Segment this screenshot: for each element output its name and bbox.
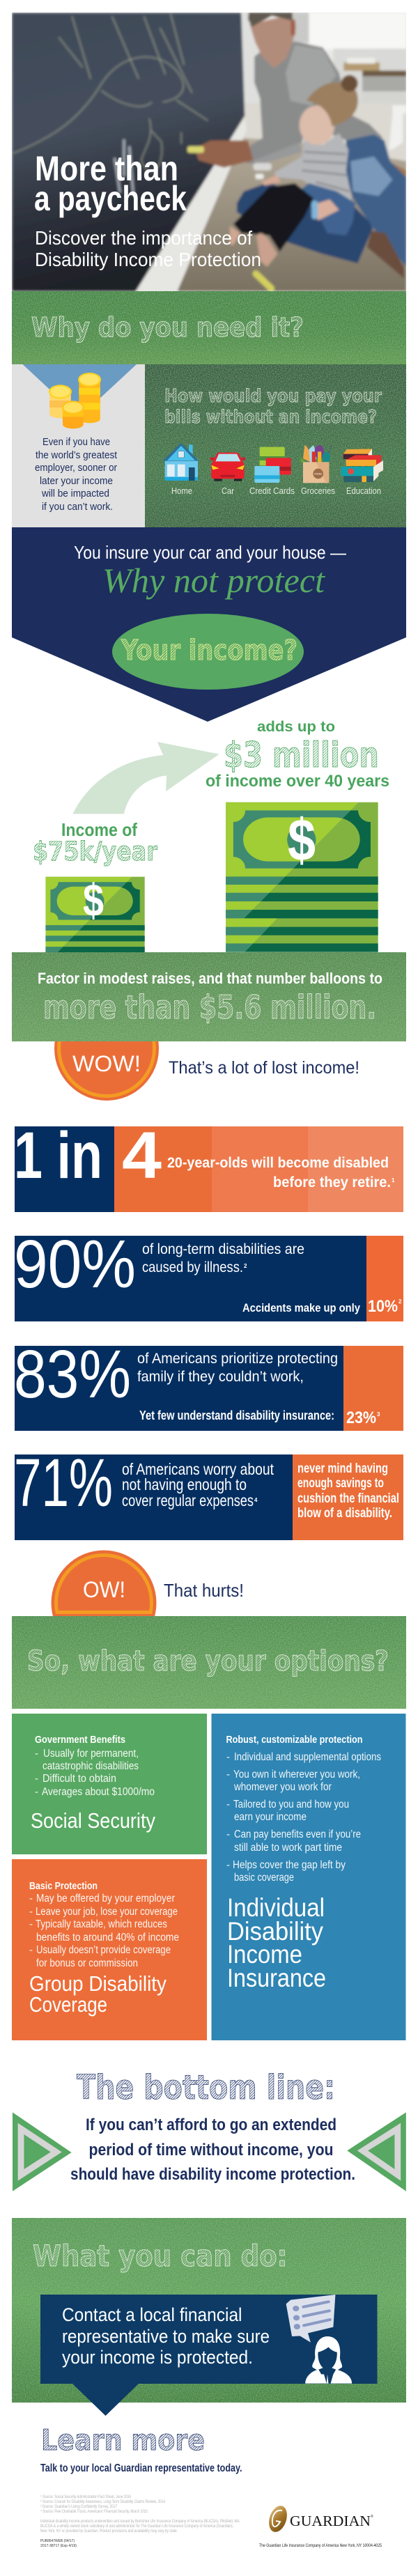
stat: 83 percent: 23% <box>346 1409 376 1427</box>
text: adds up to $3 million: $3 million <box>224 735 379 775</box>
text: income of $75k per year: Income of <box>61 819 137 840</box>
hero subtitle <box>35 227 261 270</box>
icon: groceries <box>301 445 332 483</box>
panel: individual disability income insurance: Individual <box>227 1893 325 1922</box>
footnotes <box>40 2495 240 2548</box>
callout: contact representative: representative to make sure <box>62 2326 270 2347</box>
panel: individual disability income insurance <box>212 1714 405 2040</box>
stat: 1 in 4: 1 <box>392 1177 395 1184</box>
text: even if you have: Even if you have <box>42 436 110 448</box>
heading: learn more: Learn more <box>41 2423 205 2457</box>
panel: individual disability income insurance: Individual and supplemental options <box>234 1751 381 1763</box>
icon labels: Car <box>222 486 234 496</box>
text: talk to your local representative: Talk to your local Guardian representative today. <box>40 2462 242 2474</box>
text: adds up to $3 million <box>206 719 389 791</box>
footnotes: BLICOA is a wholly owned stock subsidiary of and administrator for The Guardian Life Insurance Company of America (Guardian), <box>40 2524 233 2529</box>
panel: social security: - <box>35 1773 38 1785</box>
stat: 71 percent: cover regular expenses <box>122 1491 254 1510</box>
panel: group disability coverage: - <box>29 1906 33 1918</box>
stat: 90 percent: of long-term disabilities are <box>142 1241 304 1257</box>
stat: 71 percent: 4 <box>254 1497 258 1503</box>
icon labels <box>171 486 381 496</box>
text: bottom line statement: should have disability income protection. <box>70 2165 355 2184</box>
stat: 71 percent: 71% <box>14 1445 113 1521</box>
text: adds up to $3 million: of income over 40 years <box>206 772 389 791</box>
badge: wow: WOW! <box>72 1051 141 1076</box>
panel: group disability coverage: Basic Protection <box>29 1880 98 1892</box>
stat: 90 percent <box>14 1226 403 1321</box>
stat: 1 in 4: 20-year-olds will become disabled <box>167 1155 389 1171</box>
panel: individual disability income insurance: whomever you work for <box>233 1781 332 1793</box>
panel: individual disability income insurance: - <box>226 1829 230 1840</box>
stat: 71 percent: never mind having <box>297 1461 388 1476</box>
panel: individual disability income insurance: - <box>226 1799 230 1810</box>
icon labels: Groceries <box>301 486 335 496</box>
icon: groceries: FOOD <box>314 472 322 475</box>
panel: individual disability income insurance: Tailored to you and how you <box>233 1799 349 1810</box>
stat: 83 percent: 83% <box>14 1336 131 1412</box>
hero title: a paycheck <box>34 179 187 218</box>
icon: small stack of money: $ <box>83 874 104 926</box>
icon labels: Credit Cards <box>249 486 295 496</box>
icon: right triangle <box>347 2112 406 2191</box>
badge: ow <box>52 1551 156 1616</box>
panel: social security: Social Security <box>31 1808 155 1833</box>
icon: representative <box>305 2336 352 2384</box>
icon: big stack of money: $ <box>288 807 316 874</box>
badge: your income <box>112 614 304 690</box>
callout: contact representative: your income is protected. <box>62 2347 253 2368</box>
footnotes: ⁴ Source: Pew Charitable Trusts, Americans’ Financial Security, March 2015. <box>40 2509 148 2514</box>
panel: individual disability income insurance: You own it wherever you work, <box>233 1769 360 1780</box>
stat: 1 in 4: 4 <box>122 1119 162 1193</box>
heading: how would you pay <box>164 386 382 428</box>
panel: group disability coverage <box>12 1859 207 2040</box>
heading: how would you pay: bills without an income? <box>164 407 377 428</box>
hero subtitle: Disability Income Protection <box>35 249 261 270</box>
panel: group disability coverage: for bonus or commission <box>36 1957 138 1969</box>
icon: speech bubble <box>286 2295 335 2343</box>
stat: 90 percent: 10% <box>368 1297 398 1316</box>
text: why not protect: Why not protect <box>102 561 325 600</box>
panel: individual disability income insurance: Helps cover the gap left by <box>233 1859 346 1871</box>
panel: social security <box>12 1714 207 1854</box>
panel: social security: Government Benefits <box>35 1734 125 1746</box>
logo: guardian: ® <box>371 2514 373 2519</box>
stat: 71 percent: not having enough to <box>122 1475 247 1493</box>
stat: 90 percent: Accidents make up only <box>242 1301 360 1314</box>
badge: ow: OW! <box>83 1577 125 1602</box>
panel: group disability coverage: benefits to around 40% of income <box>36 1932 179 1943</box>
panel: group disability coverage: - <box>29 1918 33 1930</box>
panel: group disability coverage: - <box>29 1893 33 1904</box>
arrow: income growth <box>72 742 219 814</box>
panel: what you can do <box>12 2218 406 2403</box>
text: income of $75k per year <box>33 819 158 867</box>
panel: individual disability income insurance: - <box>226 1751 230 1763</box>
text: even if you have: employer, sooner or <box>35 462 117 474</box>
panel: social security: - <box>35 1748 38 1760</box>
stat: 83 percent: family if they couldn’t work, <box>137 1369 304 1385</box>
panel: group disability coverage: Group Disability <box>29 1971 167 1996</box>
stat: 90 percent: 2 <box>244 1263 247 1269</box>
stat: 1 in 4: 1 in <box>14 1119 102 1193</box>
footnotes: ³ Source: Guardian’s Living Confidently Survey, 2017 <box>40 2505 118 2509</box>
panel: social security: - <box>35 1786 38 1798</box>
panel: group disability coverage: Typically taxable, which reduces <box>36 1918 167 1930</box>
icon: left triangle <box>13 2112 72 2191</box>
panel: factor in modest raises: Factor in modest raises, and that number balloons to <box>38 970 382 987</box>
footnotes: New York, NY or provided by Guardian. Product provisions and availability may vary by state. <box>40 2529 178 2534</box>
panel: individual disability income insurance: Disability <box>227 1917 323 1946</box>
footnotes: Individual disability income products underwritten and issued by Berkshire Life Insurance Company of America (BLICOA), Pittsfield, MA. <box>40 2520 240 2524</box>
panel: employer note <box>12 364 145 527</box>
hero title <box>34 149 187 218</box>
logo: guardian: GUARDIAN <box>290 2513 371 2529</box>
icon: credit cards <box>254 447 291 483</box>
text: adds up to $3 million: adds up to <box>257 719 335 735</box>
panel: so what are your options heading <box>12 1616 406 1709</box>
panel: group disability coverage: - <box>29 1944 33 1956</box>
stat: 90 percent: 2 <box>398 1298 402 1305</box>
icon: coin stacks <box>49 373 100 428</box>
hero title: More than <box>35 149 178 188</box>
footnotes: ¹ Source: Social Security Administration Fact Sheet, June 2016 <box>40 2495 132 2499</box>
icon: books <box>341 449 383 482</box>
icon: big stack of money <box>226 802 378 952</box>
panel: individual disability income insurance: Income <box>227 1940 302 1969</box>
panel: social security: Difficult to obtain <box>42 1773 116 1785</box>
panel: factor in modest raises <box>12 952 406 1041</box>
stat: 90 percent: caused by illness. <box>142 1259 243 1275</box>
icon: home <box>162 443 199 481</box>
stat: 83 percent: 3 <box>377 1411 380 1418</box>
panel: individual disability income insurance: Can pay benefits even if you’re <box>234 1829 361 1840</box>
callout: contact representative: Contact a local financial <box>62 2304 242 2325</box>
panel: individual disability income insurance: still able to work part time <box>234 1842 342 1854</box>
icon: car <box>210 453 245 481</box>
stat: 83 percent <box>14 1336 403 1431</box>
panel: group disability coverage: Usually doesn’t provide coverage <box>36 1944 171 1956</box>
text: bottom line statement: If you can’t afford to go an extended <box>86 2116 336 2134</box>
panel: individual disability income insurance: basic coverage <box>234 1872 294 1884</box>
icon labels: Education <box>346 486 381 496</box>
stat: 83 percent: Yet few understand disability insurance: <box>139 1409 334 1422</box>
panel: individual disability income insurance: Insurance <box>227 1964 326 1992</box>
panel: why not protect your income banner <box>12 527 406 722</box>
panel: social security: Usually for permanent, <box>43 1748 139 1760</box>
panel: social security: catastrophic disabilities <box>42 1760 139 1772</box>
panel: how would you pay your bills <box>145 364 406 527</box>
stat: 71 percent: enough savings to <box>297 1476 384 1491</box>
hero photo: father and daughter at chalkboard <box>12 13 406 291</box>
logo: guardian <box>259 2504 382 2548</box>
text: even if you have: if you can’t work. <box>42 501 113 513</box>
panel: individual disability income insurance: - <box>226 1769 230 1780</box>
heading: the bottom line: The bottom line: <box>77 2068 335 2107</box>
stat: 71 percent: of Americans worry about <box>122 1460 274 1478</box>
footnotes: ² Source: Council for Disability Awareness, Long-Term Disability Claims Review, 2014 <box>40 2500 166 2504</box>
logo: guardian: The Guardian Life Insurance Company of America New York, NY 10004-4025 <box>259 2543 382 2548</box>
stat: 1 in 4: before they retire. <box>273 1174 391 1190</box>
panel: group disability coverage: May be offered by your employer <box>36 1893 175 1904</box>
text: bottom line statement <box>70 2116 355 2184</box>
icon: small stack of money <box>45 874 145 975</box>
stat: 83 percent: of Americans prioritize protecting <box>137 1351 338 1367</box>
stat: 71 percent: blow of a disability. <box>297 1506 392 1521</box>
stat: 1 in 4 <box>14 1119 403 1212</box>
panel: individual disability income insurance: Robust, customizable protection <box>226 1734 362 1746</box>
text: bottom line statement: period of time without income, you <box>89 2141 333 2159</box>
text: even if you have: will be impacted <box>41 488 109 499</box>
badge: your income: Your income? <box>121 635 297 667</box>
text: even if you have <box>35 436 118 513</box>
footnotes: 2017-38717 (Exp 4/19) <box>40 2544 77 2548</box>
text: lost income: That’s a lot of lost income! <box>169 1058 359 1078</box>
panel: why do you need it heading band <box>12 291 406 364</box>
text: even if you have: the world’s greatest <box>36 449 118 461</box>
badge: wow <box>54 996 159 1101</box>
text: even if you have: later your income <box>40 475 113 487</box>
text: that hurts: That hurts! <box>164 1580 244 1601</box>
stat: 71 percent <box>14 1445 403 1540</box>
heading: what you can do: What you can do: <box>33 2239 287 2273</box>
callout: contact representative <box>40 2295 378 2416</box>
text: income of $75k per year: $75k/year <box>33 837 158 867</box>
stat: 90 percent: 90% <box>14 1226 136 1302</box>
panel: group disability coverage: Coverage <box>29 1992 107 2017</box>
panel: group disability coverage: Leave your job, lose your coverage <box>36 1906 178 1918</box>
footnotes: PUB8547WEB (04/17) <box>40 2539 75 2543</box>
text: you insure: You insure your car and your house — <box>74 542 346 563</box>
icon labels: Home <box>171 486 192 496</box>
panel: individual disability income insurance: - <box>226 1859 230 1871</box>
heading: why do you need it: Why do you need it? <box>31 312 304 343</box>
panel: social security: Averages about $1000/mo <box>42 1786 155 1798</box>
hero subtitle: Discover the importance of <box>35 227 252 249</box>
heading: how would you pay: How would you pay your <box>164 386 382 407</box>
panel: individual disability income insurance: earn your income <box>234 1811 307 1823</box>
